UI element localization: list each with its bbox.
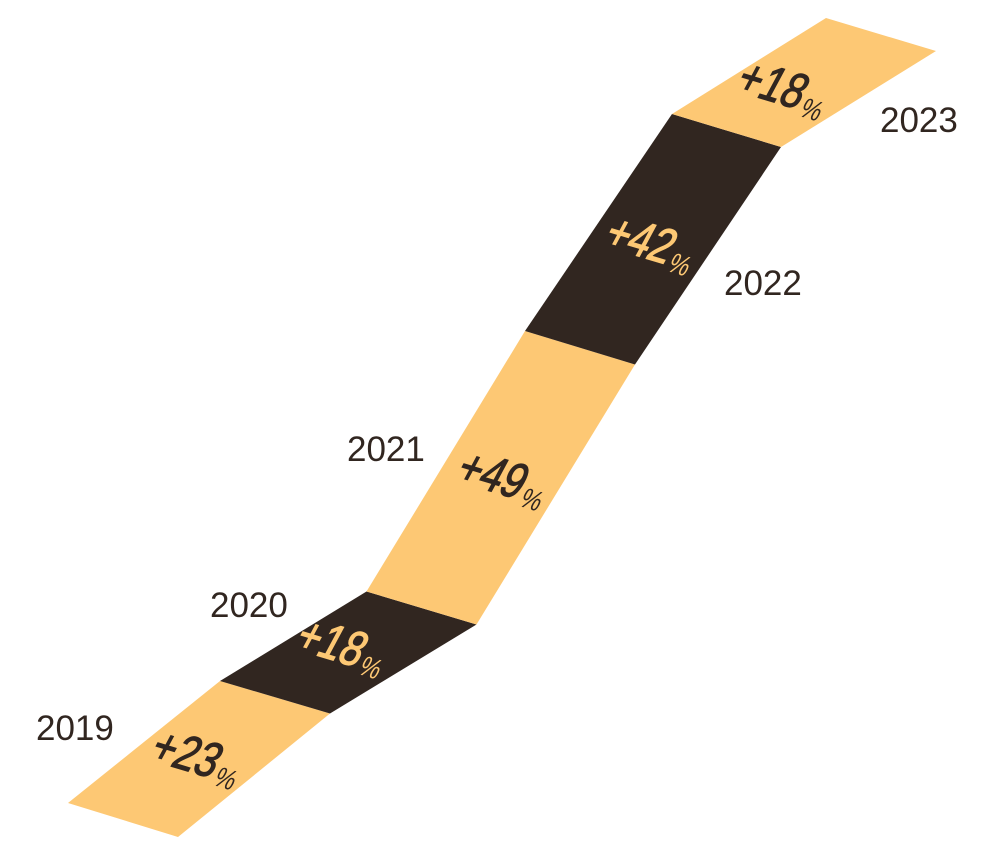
value 2023: % xyxy=(794,92,830,127)
value 2023: +18 xyxy=(728,48,819,119)
value 2020: +18 xyxy=(287,606,378,677)
segment 2023 xyxy=(672,18,936,147)
year label 2021: 2021 xyxy=(347,430,425,469)
year label 2020: 2020 xyxy=(210,586,288,625)
segment 2022 xyxy=(525,114,781,364)
year label 2023: 2023 xyxy=(880,101,958,140)
value 2021: +49 xyxy=(448,438,539,509)
year label 2019: 2019 xyxy=(36,709,114,748)
value 2019: % xyxy=(208,761,244,796)
segment 2021 xyxy=(366,331,635,624)
value 2019: +23 xyxy=(142,717,233,788)
value 2022: +42 xyxy=(596,203,687,274)
year label 2022: 2022 xyxy=(724,264,802,303)
value 2022: % xyxy=(662,247,698,282)
segment 2019 xyxy=(68,681,330,837)
value 2021: % xyxy=(514,482,550,517)
value 2020: % xyxy=(353,650,389,685)
segment 2020 xyxy=(220,592,476,714)
